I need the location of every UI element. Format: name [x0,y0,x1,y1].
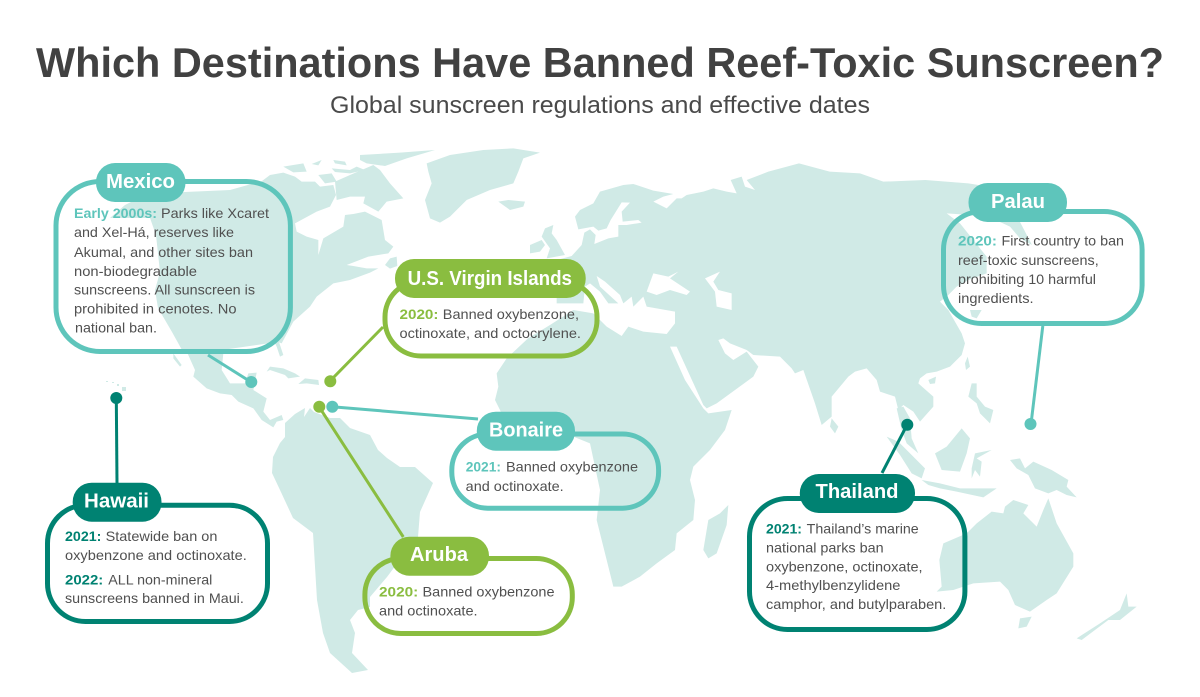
subtitle: Global sunscreen regulations and effective dates [330,92,870,119]
world map [106,148,1137,673]
panel: Palau: Palau [991,191,1045,213]
panel: Mexico: Akumal, and other sites ban [74,244,253,260]
panel: Hawaii: 2022: [65,571,103,587]
connector: U.S. Virgin Islands [324,327,383,387]
panel: Aruba: and octinoxate. [379,603,478,619]
panel: Aruba: Aruba [410,544,469,566]
panel: Mexico: sunscreens. All sunscreen is [74,282,255,298]
panel: Hawaii: ALL non-mineral [108,571,212,587]
connector: Palau [1024,326,1043,430]
eurasia [557,163,1047,425]
panel: Mexico: non-biodegradable [74,263,197,279]
panel: Bonaire: and octinoxate. [466,478,564,494]
panel: Bonaire: 2021: [466,459,501,475]
panel: U.S. Virgin Islands: Banned oxybenzone, [443,306,579,322]
panel: Thailand [750,474,965,630]
panel: U.S. Virgin Islands: octinoxate, and octocrylene. [400,325,581,341]
panel: Hawaii: Statewide ban on [106,528,217,544]
panel: Thailand: Thailand [816,481,898,503]
panel: Aruba: Banned oxybenzone [422,584,555,600]
panel: Thailand: camphor, and butylparaben. [766,596,946,612]
panel: Palau: First country to ban [1002,233,1124,249]
panel: Hawaii: oxybenzone and octinoxate. [65,547,247,563]
panel: Mexico: Parks like Xcaret [161,205,269,221]
panel: Mexico: Early 2000s: [74,205,157,221]
connector: Thailand [882,419,913,473]
panel: Mexico [56,163,290,352]
connector: Aruba [313,401,403,537]
panel: Thailand: 2021: [766,520,802,536]
panel: Aruba [365,537,572,634]
panel: Palau: prohibiting 10 harmful [958,271,1096,287]
australia [937,498,1073,612]
panel: Hawaii: Hawaii [84,491,149,513]
panel: Palau: reef-toxic sunscreens, [958,252,1099,268]
panel: Mexico: and Xel-Há, reserves like [74,224,234,240]
panel: Thailand: Thailand’s marine [807,520,919,536]
panel: Mexico: Mexico [106,171,175,193]
title: Which Destinations Have Banned Reef-Toxic Sunscreen? [36,39,1164,86]
panel: Bonaire: Bonaire [489,420,563,442]
panel: Thailand: 4-methylbenzylidene [766,577,901,593]
panel: Palau [944,183,1142,324]
panel: Bonaire [452,412,659,508]
africa [495,310,732,587]
panel: Aruba: 2020: [379,584,418,600]
panel: Hawaii [48,483,268,622]
connector: Bonaire [326,401,478,419]
hawaii islands [106,381,126,391]
panel: Palau: 2020: [958,233,997,249]
panel: Thailand: national parks ban [766,540,884,556]
panel: Hawaii: 2021: [65,528,101,544]
connector: Hawaii [110,392,122,483]
panel: Bonaire: Banned oxybenzone [506,459,638,475]
panel: U.S. Virgin Islands: 2020: [400,306,438,322]
panel: Hawaii: sunscreens banned in Maui. [65,590,244,606]
panel: U.S. Virgin Islands [385,259,597,356]
panel: Mexico: prohibited in cenotes. No [74,300,237,316]
panel: Thailand: oxybenzone, octinoxate, [766,558,923,574]
panel: Mexico: national ban. [75,320,157,336]
connector: Mexico [208,355,257,388]
panel: U.S. Virgin Islands: U.S. Virgin Islands [408,268,572,290]
south america [272,408,433,673]
panel: Palau: ingredients. [958,290,1034,306]
